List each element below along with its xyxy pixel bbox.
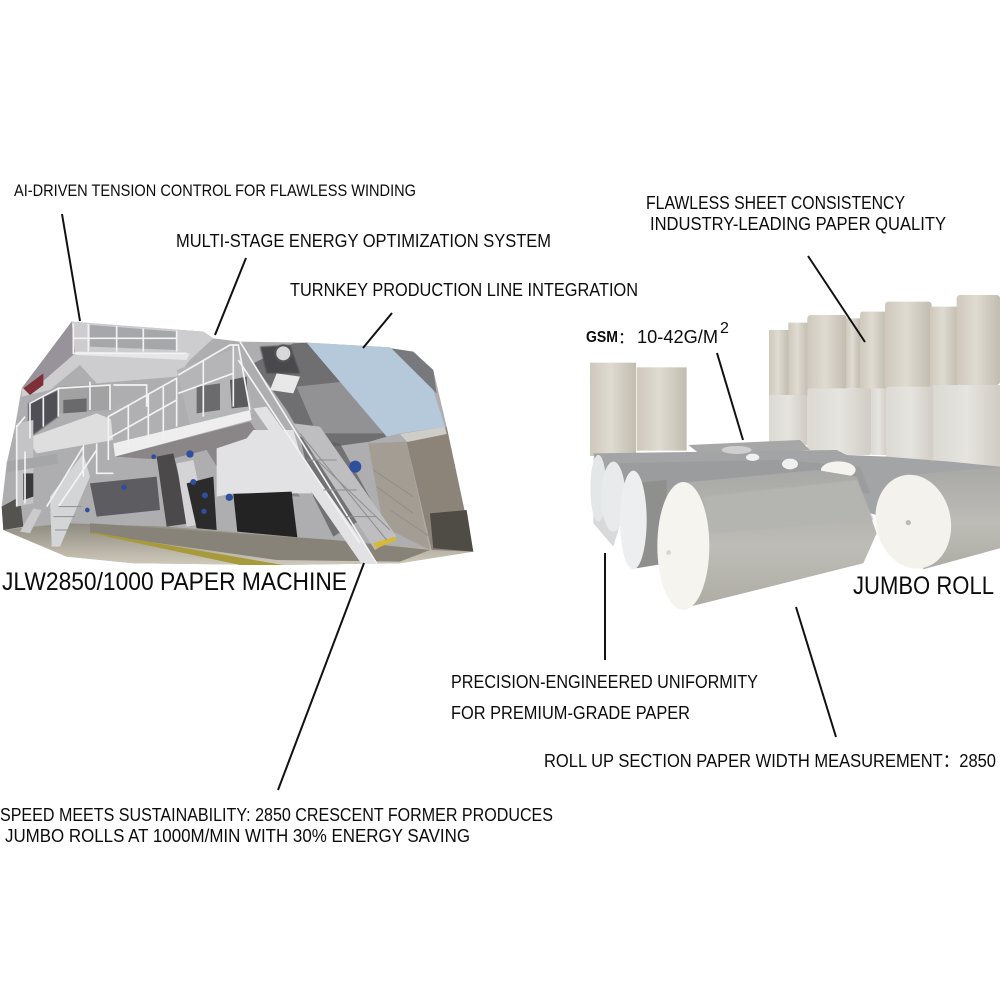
title: paper quality: INDUSTRY-LEADING PAPER QUALITY <box>650 214 946 234</box>
title: sheet consistency: FLAWLESS SHEET CONSISTENCY <box>646 193 905 213</box>
railings <box>17 323 377 563</box>
stair <box>253 407 375 564</box>
title: AI tension control: AI-DRIVEN TENSION CONTROL FOR FLAWLESS WINDING <box>14 181 416 200</box>
black panel <box>233 492 297 537</box>
back gray rolls <box>590 440 1000 569</box>
text: premium paper: FOR PREMIUM-GRADE PAPER <box>451 703 690 723</box>
title: turnkey: TURNKEY PRODUCTION LINE INTEGRATION <box>290 280 638 300</box>
text: uniformity: PRECISION-ENGINEERED UNIFORMITY <box>451 672 758 692</box>
blue valves <box>85 450 361 514</box>
label: GSM <box>586 320 729 347</box>
label: GSM: GSM <box>586 329 618 346</box>
dark columns <box>157 453 190 527</box>
leader arrows <box>62 214 865 790</box>
photo: jumbo paper rolls <box>590 295 1000 610</box>
text: jumbo rolls speed: JUMBO ROLLS AT 1000M/MIN WITH 30% ENERGY SAVING <box>5 826 470 846</box>
text: speed and sustainability: SPEED MEETS SUSTAINABILITY: 2850 CRESCENT FORMER PRODUCES <box>0 805 553 825</box>
steel housing <box>368 442 430 550</box>
label: GSM: 10-42G/M <box>637 327 718 347</box>
machine body <box>2 322 473 565</box>
paper sheet <box>307 343 445 437</box>
heading: machine name: JLW2850/1000 PAPER MACHINE <box>2 568 347 596</box>
label: GSM: 2 <box>720 320 729 337</box>
two standing rolls <box>590 363 687 456</box>
back stack of beige rolls <box>769 295 1000 468</box>
label: GSM: ： <box>618 330 634 347</box>
base and yellow strip <box>90 523 430 562</box>
photo: paper machine <box>2 322 473 565</box>
title: energy optimization: MULTI-STAGE ENERGY OPTIMIZATION SYSTEM <box>176 231 551 251</box>
front gray roll <box>657 470 911 610</box>
right gray roll <box>867 467 1000 576</box>
